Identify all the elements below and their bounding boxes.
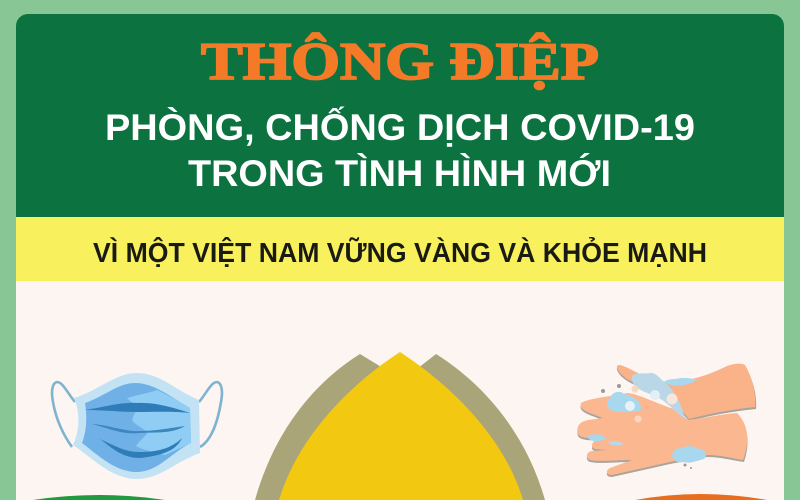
green block top [33,495,165,500]
slogan text: VÌ MỘT VIỆT NAM VỮNG VÀNG VÀ KHỎE MẠNH [93,236,707,268]
panel: green header [16,14,784,218]
orange block top [635,494,767,500]
yellow slogan banner [16,217,784,281]
soap foam top [632,373,685,419]
soap foam bottom [672,446,706,463]
center shape: yellow leaf [279,352,523,500]
soap foam middle [607,392,641,412]
panel: cream body [16,270,784,500]
subtitle line 2: TRONG TÌNH HÌNH MỚI [188,152,611,194]
back arm shadow [617,365,756,421]
icon: washing hands [577,364,756,477]
icon: face mask [52,373,222,479]
center shape: grey back leaf [255,354,545,500]
title: THÔNG ĐIỆP [201,33,599,91]
subtitle line 1: PHÒNG, CHỐNG DỊCH COVID-19 [105,106,695,148]
back arm [617,364,755,419]
front hand shadow [577,395,748,477]
front hand [577,393,747,475]
soap foam left [587,434,606,441]
